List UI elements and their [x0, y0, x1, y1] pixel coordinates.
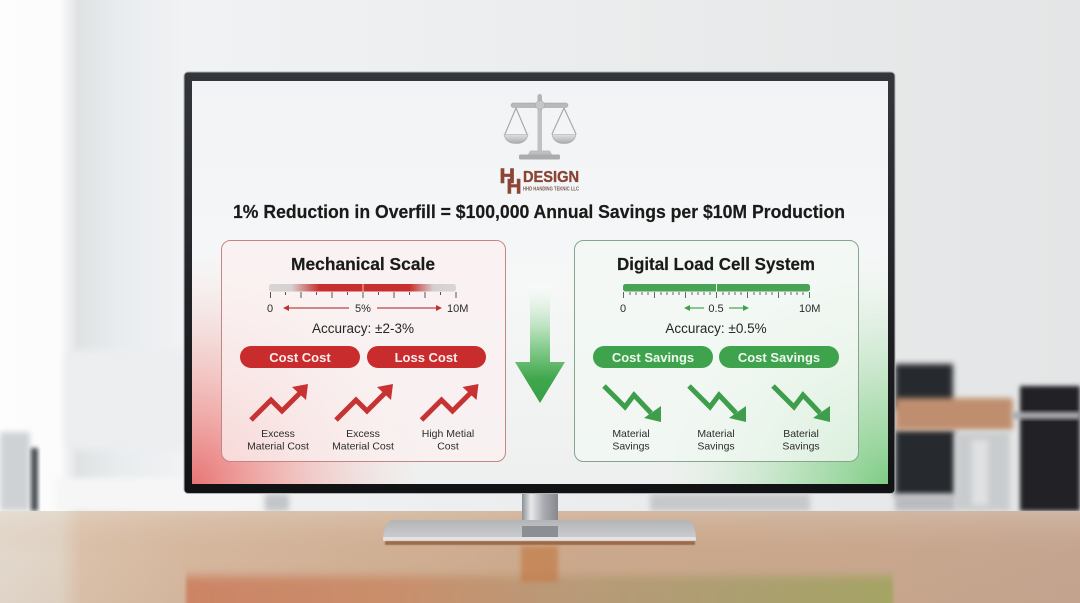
scale labels: digital: 0.5	[708, 303, 724, 315]
pill: loss cost	[367, 346, 486, 368]
monitor frame	[184, 72, 895, 494]
pill: cost savings 2	[719, 346, 839, 368]
icon: rising arrow 1	[251, 384, 308, 420]
label: high metial cost: Cost	[437, 440, 459, 452]
label: material savings 2: Material	[697, 428, 735, 440]
icon: rising arrow 2	[336, 384, 393, 420]
label: high metial cost: High Metial	[422, 428, 474, 440]
scale labels: digital	[620, 304, 820, 312]
pill: cost savings 1: Cost Savings	[612, 350, 694, 365]
heading: mechanical scale: Mechanical Scale	[291, 254, 435, 274]
scale labels: mechanical scale: 5%	[355, 303, 371, 315]
icon: falling arrow 2	[689, 386, 746, 422]
pill: cost savings 1	[593, 346, 713, 368]
logo: H and H Design: DESIGN	[523, 169, 579, 186]
logo: H and H Design: H	[500, 165, 515, 188]
wooden table	[0, 511, 1080, 603]
icon: falling arrow 1	[604, 386, 661, 422]
logo: H and H Design	[500, 168, 579, 194]
label: excess material cost 2: Excess	[346, 428, 380, 440]
monitor screen	[192, 81, 888, 484]
arrow: big down arrow	[515, 298, 565, 403]
scale labels: digital: 10M	[799, 303, 820, 315]
label: baterial savings: Baterial	[783, 428, 819, 440]
label: excess material cost 1: Excess	[261, 428, 295, 440]
scale labels: mechanical scale: 10M	[447, 303, 468, 315]
scale labels: mechanical scale: 0	[267, 303, 273, 315]
pill: cost cost: Cost Cost	[269, 350, 331, 365]
label: material savings 2: Savings	[697, 440, 735, 452]
label: material savings 1: Material	[612, 428, 650, 440]
pill: loss cost: Loss Cost	[395, 350, 458, 365]
icon: falling arrow 3	[773, 386, 830, 422]
heading: digital load cell system: Digital Load Cell System	[617, 254, 815, 274]
title: 1% Reduction in Overfill = $100,000 Annual Savings per $10M Production	[233, 201, 845, 222]
accuracy: mechanical scale: Accuracy: ±2-3%	[312, 321, 414, 336]
panel: mechanical scale	[222, 240, 506, 462]
scale labels: digital: 0	[620, 303, 626, 315]
scale labels: mechanical scale	[267, 304, 468, 312]
logo: H and H Design: HHD HANDING TEKNIC LLC	[523, 186, 579, 192]
label: excess material cost 1: Material Cost	[247, 440, 309, 452]
accuracy: digital: Accuracy: ±0.5%	[665, 321, 767, 336]
panel: digital load cell system	[574, 240, 858, 462]
label: material savings 1: Savings	[612, 440, 650, 452]
logo: H and H Design: H	[506, 176, 522, 198]
pill: cost cost	[240, 346, 360, 368]
gauge bar: mechanical scale	[269, 284, 456, 298]
label: excess material cost 2: Material Cost	[332, 440, 394, 452]
icon: rising arrow 3	[422, 384, 478, 420]
pill: cost savings 2: Cost Savings	[738, 350, 820, 365]
monitor stand	[383, 493, 696, 582]
label: baterial savings: Savings	[782, 440, 820, 452]
icon: balance scale	[504, 94, 576, 160]
gauge bar: digital	[623, 284, 810, 298]
